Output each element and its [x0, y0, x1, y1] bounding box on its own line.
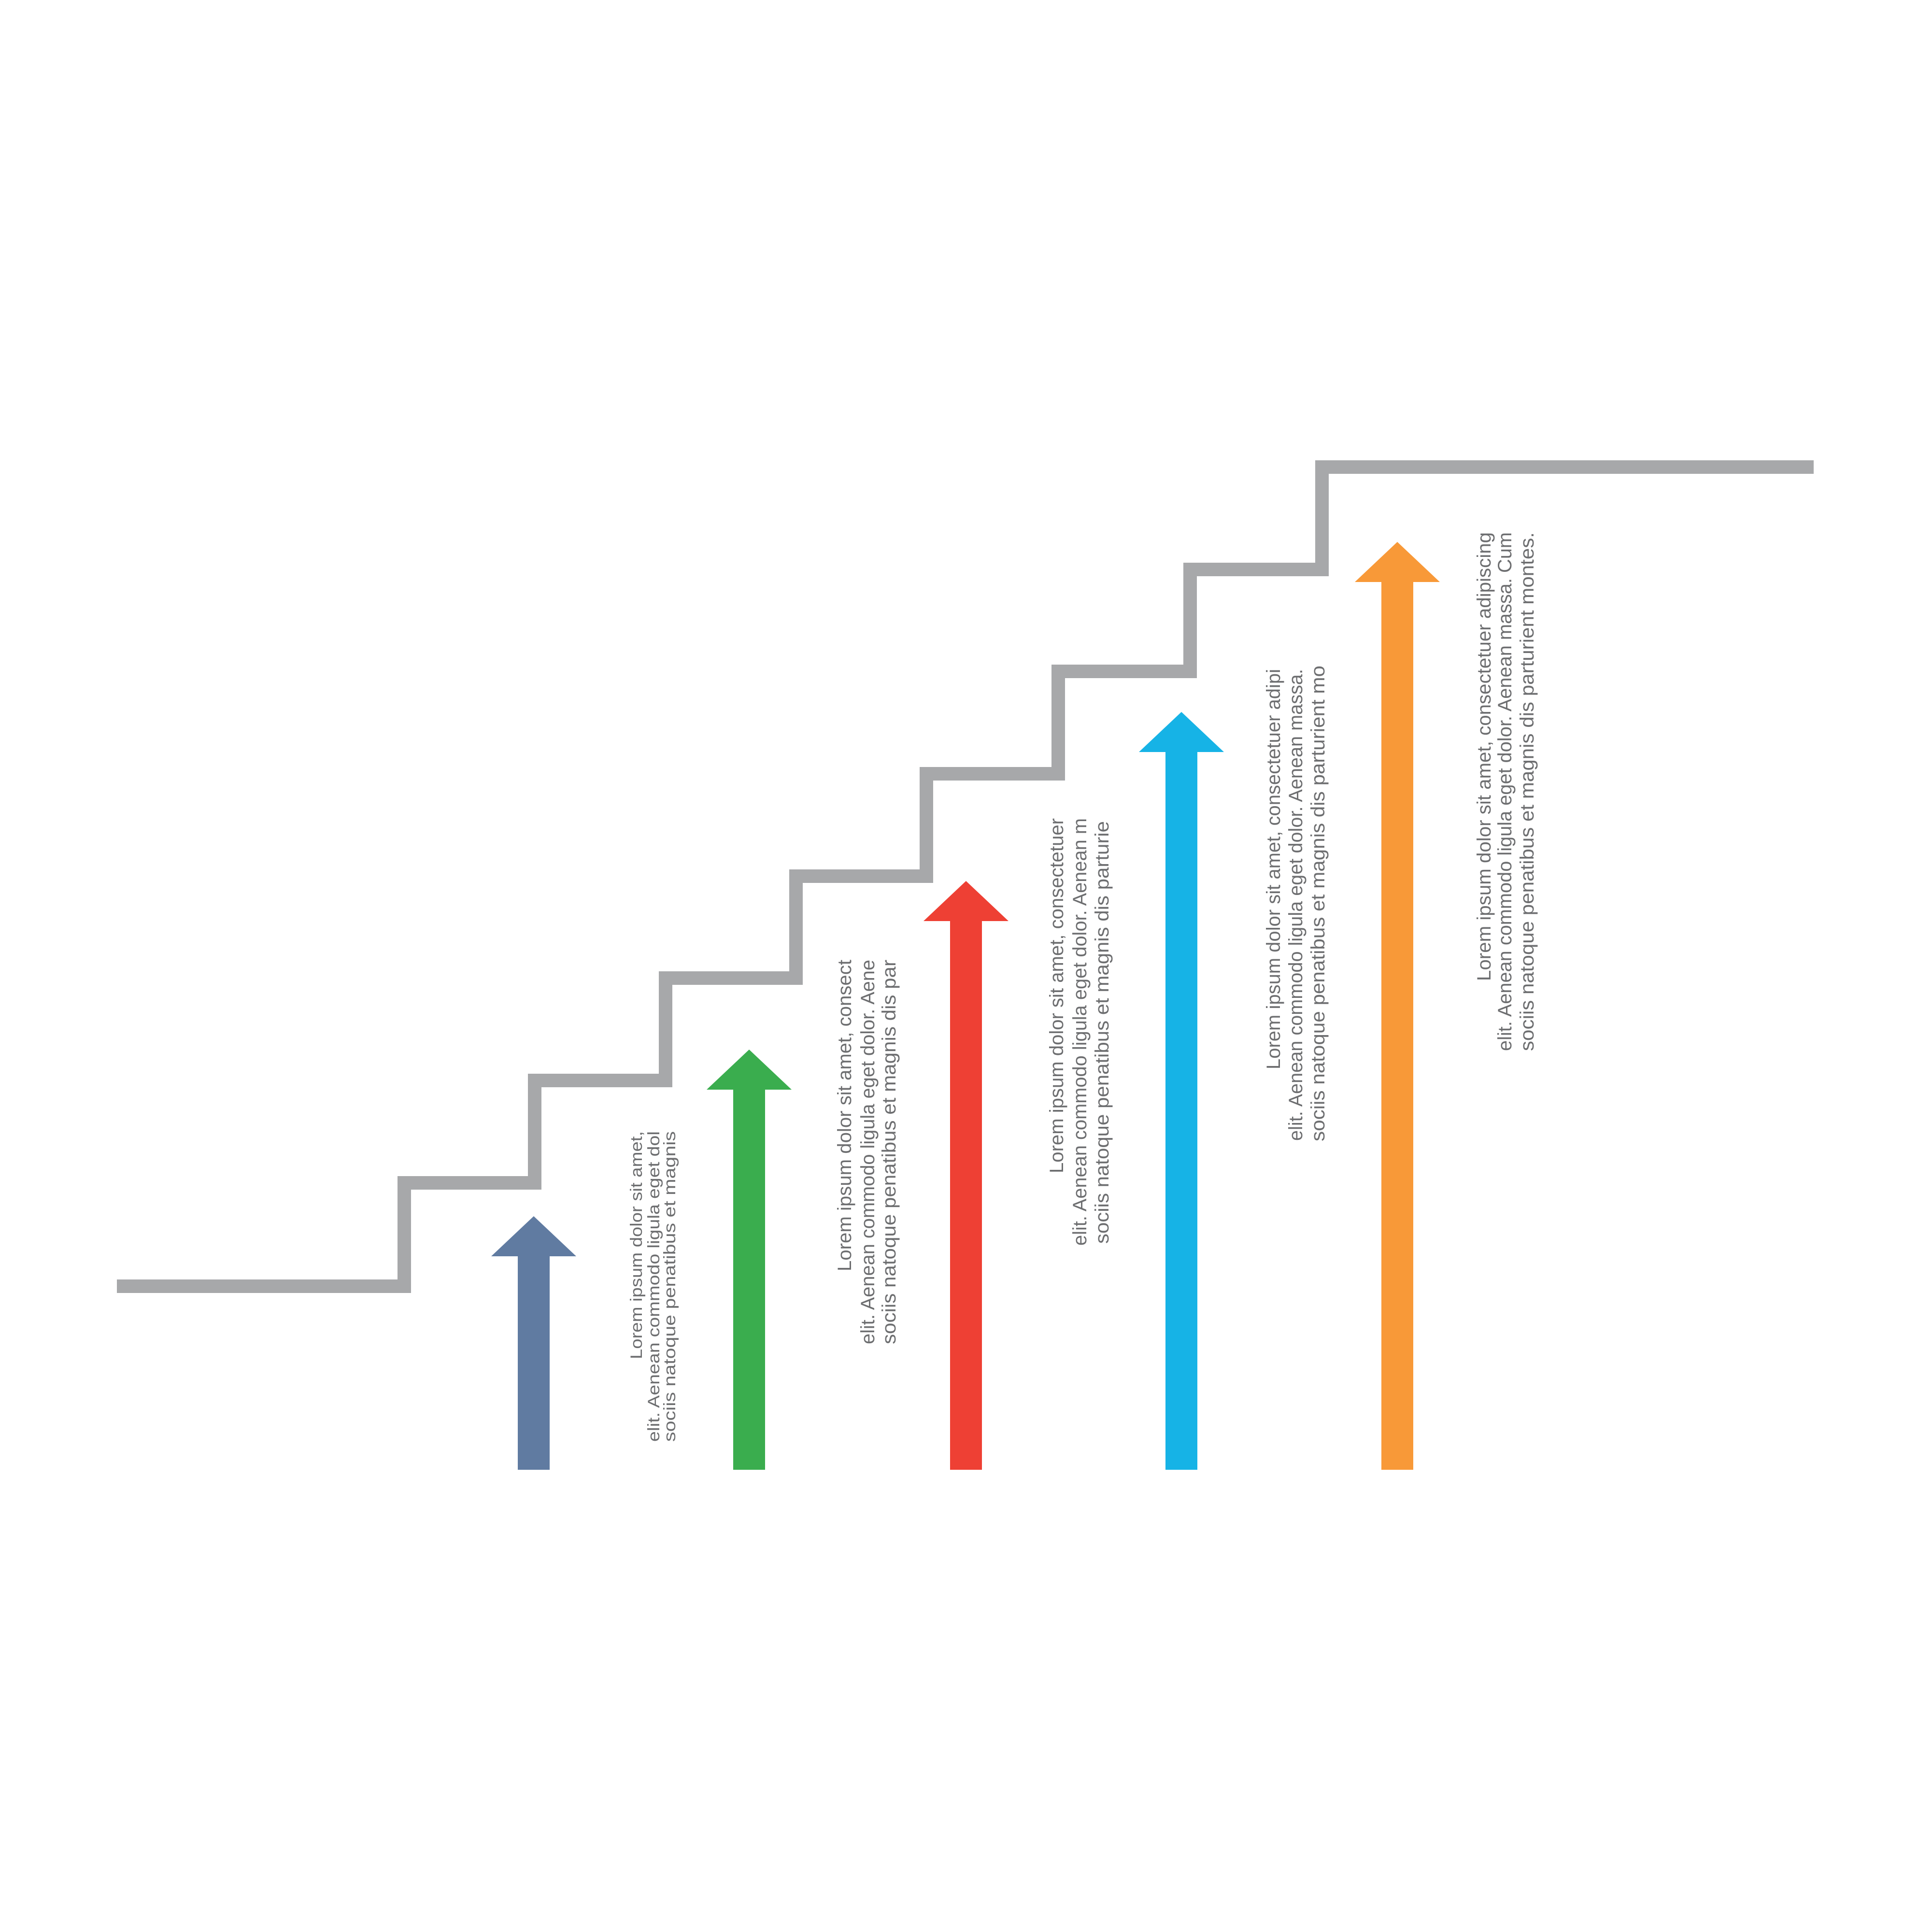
text block: green: Lorem ipsum dolor sit amet, consect: [834, 960, 855, 1271]
arrow: red: [923, 881, 1009, 1470]
text block: orange: elit. Aenean commodo ligula eget dolor. Aenean massa. Cum: [1494, 532, 1516, 1051]
text block: green: [834, 960, 900, 1344]
text block: cyan: [1263, 666, 1329, 1141]
text block: cyan: Lorem ipsum dolor sit amet, consectetuer adipi: [1263, 669, 1284, 1069]
arrow: green: [707, 1050, 792, 1470]
arrow: blue: [491, 1216, 576, 1470]
text block: red: elit. Aenean commodo ligula eget dolor. Aenean m: [1069, 818, 1091, 1246]
text block: orange: [1474, 532, 1538, 1051]
text block: green: sociis natoque penatibus et magnis dis par: [879, 960, 900, 1344]
text block: blue: Lorem ipsum dolor sit amet,: [627, 1131, 646, 1359]
text block: blue: elit. Aenean commodo ligula eget dol: [645, 1131, 663, 1442]
text block: red: Lorem ipsum dolor sit amet, consectetuer: [1046, 818, 1067, 1173]
text block: blue: sociis natoque penatibus et magnis: [661, 1131, 679, 1442]
text block: orange: Lorem ipsum dolor sit amet, consectetuer adipiscing: [1474, 532, 1495, 981]
staircase line: [117, 467, 1814, 1286]
text block: cyan: elit. Aenean commodo ligula eget dolor. Aenean massa.: [1285, 669, 1307, 1141]
text block: orange: sociis natoque penatibus et magnis dis parturient montes.: [1517, 532, 1538, 1051]
text block: green: elit. Aenean commodo ligula eget dolor. Aene: [857, 960, 879, 1344]
text block: red: [1046, 818, 1113, 1246]
arrow: orange: [1355, 542, 1440, 1470]
arrow: cyan: [1139, 712, 1224, 1470]
text block: cyan: sociis natoque penatibus et magnis dis parturient mo: [1307, 666, 1329, 1141]
text block: blue: [627, 1131, 679, 1442]
text block: red: sociis natoque penatibus et magnis dis parturie: [1092, 821, 1113, 1244]
